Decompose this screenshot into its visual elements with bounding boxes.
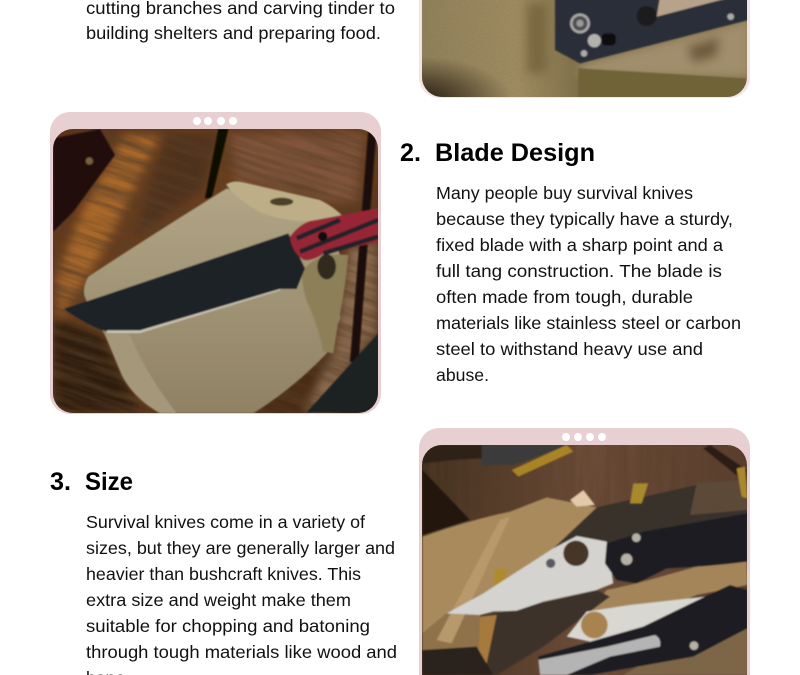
heading: Blade Design: Blade Design	[435, 139, 595, 167]
text: blade design paragraph: often made from tough, durable	[436, 287, 693, 307]
frame: pink window with dots	[419, 428, 750, 675]
panel: knife photo 2	[50, 112, 381, 414]
text: blade design paragraph: abuse.	[436, 365, 489, 385]
text: intro paragraph ending: building shelters and preparing food.	[86, 23, 381, 43]
text: size paragraph	[86, 512, 397, 675]
photo: black knife on canvas pouch	[53, 129, 378, 413]
text: size paragraph: suitable for chopping and batoning	[86, 616, 370, 636]
heading: Size: 3.	[50, 468, 71, 496]
panel: knife photo 1	[419, 0, 750, 100]
text: size paragraph: sizes, but they are generally larger and	[86, 538, 395, 558]
frame: pink window with dots	[50, 112, 381, 414]
heading: Size	[50, 468, 133, 496]
text: intro paragraph ending	[86, 0, 395, 43]
text: blade design paragraph: steel to withstand heavy use and	[436, 339, 703, 359]
heading: Size: Size	[85, 468, 133, 496]
text: blade design paragraph: full tang construction. The blade is	[436, 261, 722, 281]
text: size paragraph: Survival knives come in a variety of	[86, 512, 365, 532]
text: blade design paragraph: Many people buy survival knives	[436, 183, 693, 203]
photo: serrated folding knives on cloth	[420, 443, 750, 675]
text: blade design paragraph: fixed blade with a sharp point and a	[436, 235, 723, 255]
text: size paragraph: heavier than bushcraft knives. This	[86, 564, 361, 584]
text: size paragraph: extra size and weight make them	[86, 590, 351, 610]
text: size paragraph: through tough materials like wood and	[86, 642, 397, 662]
text: blade design paragraph	[436, 183, 741, 385]
panel: knife photo 3	[419, 428, 750, 675]
text: blade design paragraph: because they typically have a sturdy,	[436, 209, 733, 229]
heading: Blade Design: 2.	[400, 139, 421, 167]
text: blade design paragraph: materials like stainless steel or carbon	[436, 313, 741, 333]
